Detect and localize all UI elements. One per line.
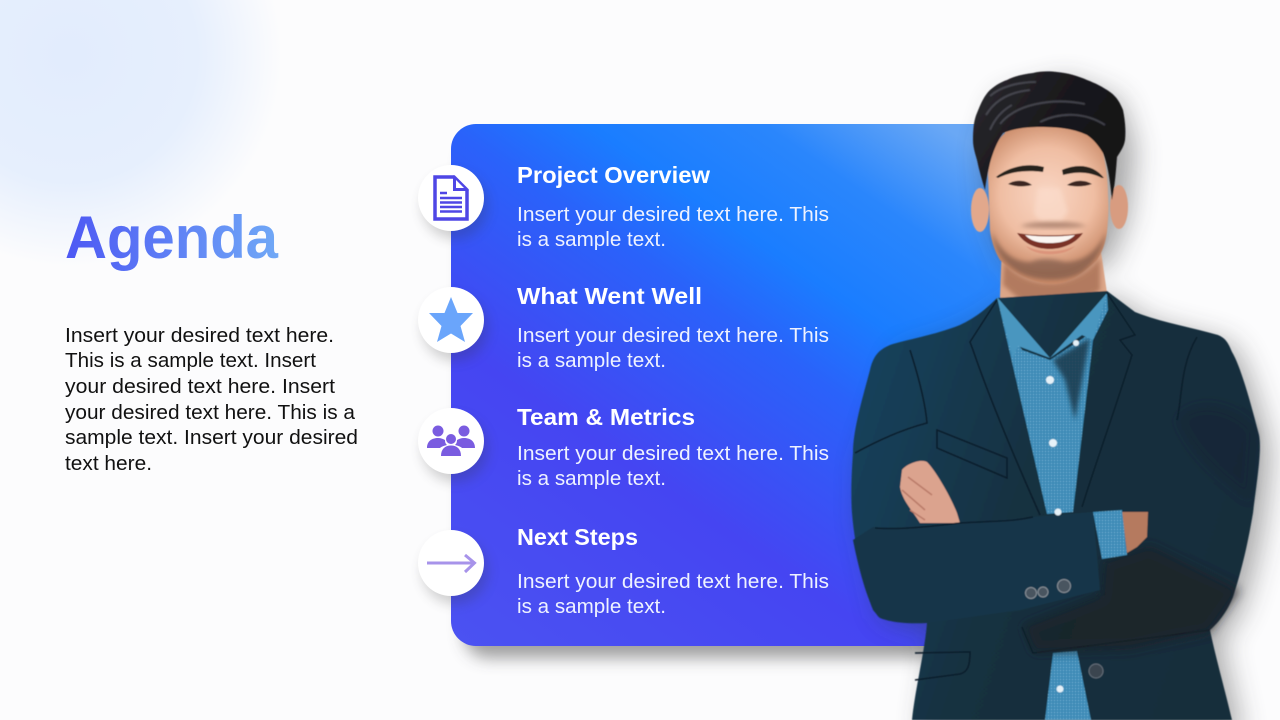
agenda item: Next Steps: Insert your desired text here. This: [517, 570, 829, 593]
shirt collar: [997, 293, 1107, 358]
moustache: [1020, 222, 1087, 228]
smile: [1017, 233, 1083, 249]
shirt buttons: [1046, 340, 1079, 692]
left hand: [900, 461, 960, 523]
agenda item: Next Steps: is a sample text.: [517, 595, 666, 618]
intro text block: [65, 324, 358, 475]
jacket shade: [1022, 545, 1240, 653]
person shadow: [862, 80, 1270, 720]
agenda item: Project Overview: Insert your desired text here. This: [517, 203, 829, 226]
hair highlights: [986, 82, 1105, 130]
sleeve shade: [1177, 406, 1255, 500]
intro text block: Insert your desired text here.: [65, 324, 334, 347]
agenda item: Team & Metrics: is a sample text.: [517, 467, 666, 490]
shirt cuff: [1093, 510, 1127, 559]
panel shadow: [464, 140, 984, 658]
agenda item: Next Steps: Next Steps: [517, 524, 638, 550]
lower lip: [1026, 246, 1075, 254]
intro text block: your desired text here. Insert: [65, 375, 335, 398]
agenda item: Project Overview: [517, 162, 829, 251]
agenda item: Team & Metrics: Insert your desired text here. This: [517, 442, 829, 465]
jacket: [851, 291, 1260, 720]
agenda item: Team & Metrics: [517, 404, 829, 490]
icon: star: [418, 287, 488, 361]
eyes: [1008, 181, 1032, 186]
forearm: [853, 512, 1100, 623]
jacket lapels: [855, 293, 1210, 680]
decorative corner glow: [0, 0, 300, 280]
agenda item: What Went Well: is a sample text.: [517, 349, 666, 372]
nose shade: [1034, 188, 1068, 220]
agenda item: Project Overview: Project Overview: [517, 162, 711, 188]
right hand: [1122, 512, 1148, 553]
agenda item: Next Steps: [517, 524, 829, 618]
jacket button: [1089, 664, 1103, 678]
sleeve buttons: [1026, 580, 1070, 598]
person illustration: [851, 71, 1260, 720]
agenda item: Project Overview: is a sample text.: [517, 228, 666, 251]
icon: arrow: [418, 530, 488, 604]
eyebrows: [996, 165, 1044, 178]
hair: [973, 71, 1125, 200]
neck: [1000, 245, 1107, 362]
agenda item: What Went Well: What Went Well: [517, 283, 702, 309]
intro text block: your desired text here. This is a: [65, 401, 356, 424]
icon: document: [418, 165, 488, 239]
agenda item: What Went Well: [517, 283, 829, 372]
intro text block: sample text. Insert your desired: [65, 426, 358, 449]
agenda item: What Went Well: Insert your desired text here. This: [517, 324, 829, 347]
beard shadow: [992, 232, 1106, 280]
face: [988, 125, 1108, 284]
agenda item: Team & Metrics: Team & Metrics: [517, 404, 695, 430]
intro text block: text here.: [65, 452, 152, 475]
shirt shadow: [1053, 338, 1090, 420]
gradient agenda panel: [451, 124, 1011, 646]
intro text block: This is a sample text. Insert: [65, 349, 316, 372]
shirt: [997, 293, 1108, 720]
title: Agenda: [65, 204, 279, 271]
ears: [971, 188, 989, 232]
icon: team: [418, 408, 488, 482]
